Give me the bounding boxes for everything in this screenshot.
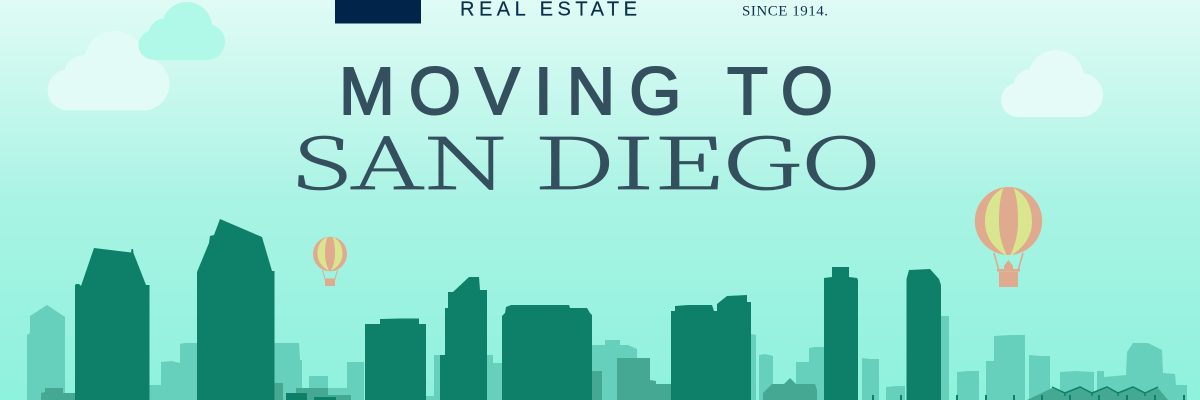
balloon: small — [313, 237, 347, 286]
tower: left twin — [75, 248, 150, 400]
small dark buildings — [286, 393, 307, 400]
tower: wide block — [502, 305, 592, 400]
tower: tall capped — [824, 267, 858, 400]
waterfront poles — [872, 395, 1185, 400]
title: moving to: MOVING TO — [339, 54, 833, 129]
skyline: distant buildings — [27, 305, 1187, 400]
tower: chamfered — [906, 269, 941, 400]
convention center sails — [1052, 387, 1158, 396]
tower: stepped — [440, 277, 487, 400]
skyline: mid-ground buildings — [41, 358, 1168, 400]
tagline: since 1914: SINCE 1914. — [742, 4, 828, 20]
cloud: small left — [138, 2, 225, 60]
skyline: foreground towers — [75, 219, 1185, 400]
cloud: large left — [48, 31, 170, 110]
cloud: right — [1001, 50, 1103, 117]
balloon: large — [975, 187, 1042, 287]
title: san diego: SAN DIEGO — [293, 106, 881, 210]
tower: right twin — [197, 219, 274, 400]
tower: crenellated — [365, 318, 426, 400]
logo block — [335, 0, 421, 24]
tower: double roof — [671, 295, 751, 400]
